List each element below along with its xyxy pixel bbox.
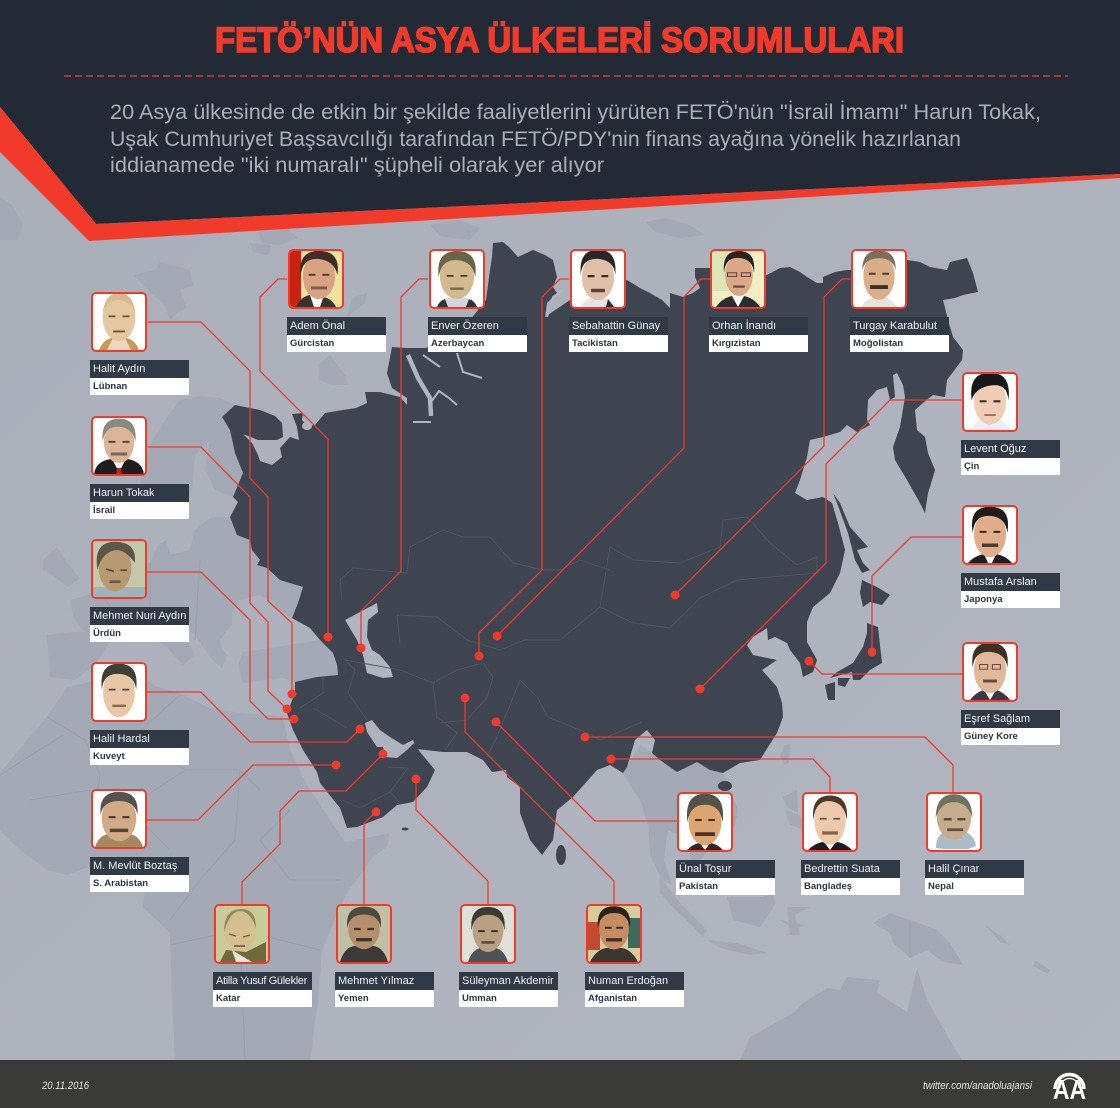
- name: M. Mevlüt Boztaş: [93, 860, 177, 872]
- name: Turgay Karabulut: [853, 320, 937, 332]
- card: Halit Aydın: [90, 292, 189, 395]
- map: dark islands (Sakhalin, Japan, Hainan, Sri Lanka, Socotra): [402, 493, 890, 865]
- name: Bedrettin Suata: [804, 863, 880, 875]
- name: [213, 972, 312, 990]
- country: [90, 624, 189, 642]
- twitter handle: twitter.com/anadoluajansi: [923, 1080, 1032, 1092]
- country: Nepal: [928, 880, 954, 892]
- connector: Harun Tokak to Israel: [148, 447, 292, 714]
- country: [459, 990, 558, 1007]
- title: FETÖ’NÜN ASYA ÜLKELERİ SORUMLULARI: [215, 21, 904, 60]
- name: [90, 360, 189, 378]
- country: [90, 502, 189, 519]
- connector: Atilla Yusuf Gülekler to Qatar: [242, 750, 388, 904]
- name: [90, 484, 189, 502]
- photo: [288, 249, 344, 309]
- country: [287, 334, 386, 352]
- photo: [962, 372, 1018, 432]
- card: Mehmet Yılmaz: [335, 904, 434, 1007]
- country: Kuveyt: [93, 750, 125, 762]
- connector: Halit Aydın to Lebanon: [148, 322, 296, 698]
- connector: Mustafa Arslan to Japan: [868, 537, 962, 656]
- connector: Adem Önal to Georgia: [260, 279, 332, 642]
- connector: Bedrettin Suata to Bangladesh: [606, 754, 830, 793]
- name: Mehmet Yılmaz: [338, 975, 414, 987]
- country: [850, 334, 949, 352]
- name: [90, 607, 189, 624]
- name: Sebahattin Günay: [572, 320, 660, 332]
- card: Halil Hardal: [90, 662, 189, 765]
- photo: [851, 249, 907, 309]
- card: Levent Oğuz: [961, 372, 1060, 475]
- country: [709, 334, 808, 352]
- card: Süleyman Akdemir: [459, 904, 558, 1007]
- name: Atilla Yusuf Gülekler: [216, 975, 307, 987]
- name: Adem Önal: [290, 320, 345, 332]
- photo: [570, 249, 626, 309]
- country: Tacikistan: [572, 338, 618, 348]
- card: Adem Önal: [287, 249, 386, 352]
- name: [569, 317, 668, 334]
- country: Çin: [964, 460, 979, 472]
- name: [961, 573, 1060, 590]
- country: [961, 458, 1060, 475]
- name: [459, 972, 558, 990]
- card: Orhan İnandı: [709, 249, 808, 352]
- photo: [677, 792, 733, 852]
- card: Turgay Karabulut: [850, 249, 949, 352]
- card: Enver Özeren: [428, 249, 527, 352]
- world map: grey land masses: [0, 197, 1050, 1060]
- photo: [460, 904, 516, 964]
- name: Mehmet Nuri Aydın: [93, 610, 186, 622]
- country: [801, 878, 900, 895]
- connector: Halil Hardal to Kuwait: [147, 692, 364, 742]
- photo: [91, 416, 147, 476]
- country: Katar: [216, 992, 240, 1004]
- card: Sebahattin Günay: [569, 249, 668, 352]
- country: [569, 334, 668, 352]
- photo: [91, 662, 147, 722]
- name: Harun Tokak: [93, 487, 155, 499]
- intro paragraph: [110, 101, 1041, 177]
- connector: Mehmet Nuri Aydın to Jordan: [147, 572, 298, 724]
- name: Halit Aydın: [93, 363, 145, 375]
- card: Harun Tokak: [90, 416, 189, 519]
- name: [850, 317, 949, 334]
- country: Gürcistan: [290, 338, 334, 348]
- name: Enver Özeren: [431, 320, 499, 332]
- name: Levent Oğuz: [964, 443, 1026, 455]
- photo: [586, 904, 642, 964]
- connector: Enver Özeren to Azerbaijan: [356, 279, 428, 652]
- connector: Mehmet Yılmaz to Yemen: [364, 808, 380, 904]
- country: Yemen: [338, 992, 369, 1004]
- country: Azerbaycan: [431, 338, 484, 348]
- name: Numan Erdoğan: [588, 975, 668, 987]
- map: country borders inside Asia: [300, 517, 817, 808]
- country: [428, 334, 527, 352]
- card: Halil Çınar: [925, 792, 1024, 895]
- card: Ünal Toşur: [676, 792, 775, 895]
- country: İsrail: [93, 504, 115, 516]
- country: [925, 878, 1024, 895]
- name: [585, 972, 684, 990]
- country: Japonya: [964, 594, 1003, 604]
- photo: [926, 792, 982, 852]
- header: dark banner: [0, 0, 1120, 224]
- photo: [91, 789, 147, 849]
- country: Umman: [462, 992, 497, 1004]
- country: Bangladeş: [804, 880, 852, 892]
- connector: M. Mevlüt Boztaş to Saudi Arabia: [147, 760, 340, 820]
- photo: [962, 642, 1018, 702]
- country: Kırgızistan: [712, 338, 761, 348]
- country: [335, 990, 434, 1007]
- photo: [336, 904, 392, 964]
- country: S. Arabistan: [93, 878, 148, 888]
- country: [585, 990, 684, 1007]
- photo: [802, 792, 858, 852]
- header: red accent band: [0, 107, 1120, 241]
- intro paragraph: iddianamede "iki numaralı" şüpheli olarak yer alıyor: [110, 154, 604, 177]
- card: Eşref Sağlam: [961, 642, 1060, 745]
- connector: Süleyman Akdemir to Oman: [412, 774, 488, 904]
- world map: faint borders on land: [0, 560, 910, 1060]
- connector: Sebahattin Günay to Tajikistan: [474, 279, 569, 660]
- name: Süleyman Akdemir: [462, 975, 554, 987]
- country: Afganistan: [588, 992, 637, 1004]
- country: [676, 878, 775, 895]
- name: Ünal Toşur: [679, 863, 731, 875]
- country: Ürdün: [93, 628, 121, 638]
- country: [213, 990, 312, 1007]
- photo: [429, 249, 485, 309]
- country: Moğolistan: [853, 338, 903, 348]
- name: [709, 317, 808, 334]
- map: Asia highlighted in dark: [222, 242, 978, 855]
- card: Atilla Yusuf Gülekler: [213, 904, 312, 1007]
- name: Orhan İnandı: [712, 320, 776, 332]
- country: [961, 728, 1060, 745]
- card: Mehmet Nuri Aydın: [90, 539, 189, 642]
- footer bar: [0, 1060, 1120, 1108]
- name: [676, 860, 775, 878]
- map: seas and inlets over Asia: [302, 422, 393, 678]
- connector: Halil Çınar to Nepal: [580, 732, 953, 793]
- photo: [710, 249, 766, 309]
- name: Mustafa Arslan: [964, 576, 1037, 588]
- name: [428, 317, 527, 334]
- card: Numan Erdoğan: [585, 904, 684, 1007]
- connector: Turgay Karabulut to Mongolia: [670, 279, 852, 600]
- card: Bedrettin Suata: [801, 792, 900, 895]
- name: [90, 730, 189, 748]
- name: Halil Çınar: [928, 863, 979, 875]
- photo: [962, 505, 1018, 565]
- country: [961, 590, 1060, 608]
- photo: [91, 539, 147, 599]
- name: [287, 317, 386, 334]
- connector: Ünal Toşur to Pakistan: [492, 718, 677, 821]
- name: [961, 440, 1060, 458]
- photo: [91, 292, 147, 352]
- connector: Levent Oğuz to China: [696, 400, 962, 694]
- intro paragraph: 20 Asya ülkesinde de etkin bir şekilde faaliyetlerini yürüten FETÖ'nün "İsrail İmamı" Harun Tokak,: [110, 101, 1041, 124]
- intro paragraph: Uşak Cumhuriyet Başsavcılığı tarafından FETÖ/PDY'nin finans ayağına yönelik hazırlanan: [110, 128, 961, 151]
- country: [90, 378, 189, 395]
- name: [335, 972, 434, 990]
- card: M. Mevlüt Boztaş: [90, 789, 189, 892]
- name: [90, 857, 189, 874]
- connector: Orhan İnandı to Kyrgyzstan: [492, 279, 710, 640]
- country: [90, 874, 189, 892]
- connector: Eşref Sağlam to South Korea: [804, 656, 962, 674]
- icon: AA logo: AA: [1053, 1074, 1086, 1105]
- name: [961, 710, 1060, 728]
- country: Lübnan: [93, 380, 127, 392]
- name: Eşref Sağlam: [964, 713, 1030, 725]
- name: [925, 860, 1024, 878]
- card: Mustafa Arslan: [961, 505, 1060, 608]
- country: Güney Kore: [964, 730, 1018, 742]
- connector: Numan Erdoğan to Afghanistan: [460, 694, 614, 904]
- country: Pakistan: [679, 880, 718, 892]
- name: [801, 860, 900, 878]
- photo: [214, 904, 270, 964]
- date: 20.11.2016: [41, 1080, 90, 1092]
- name: Halil Hardal: [93, 733, 150, 745]
- country: [90, 748, 189, 765]
